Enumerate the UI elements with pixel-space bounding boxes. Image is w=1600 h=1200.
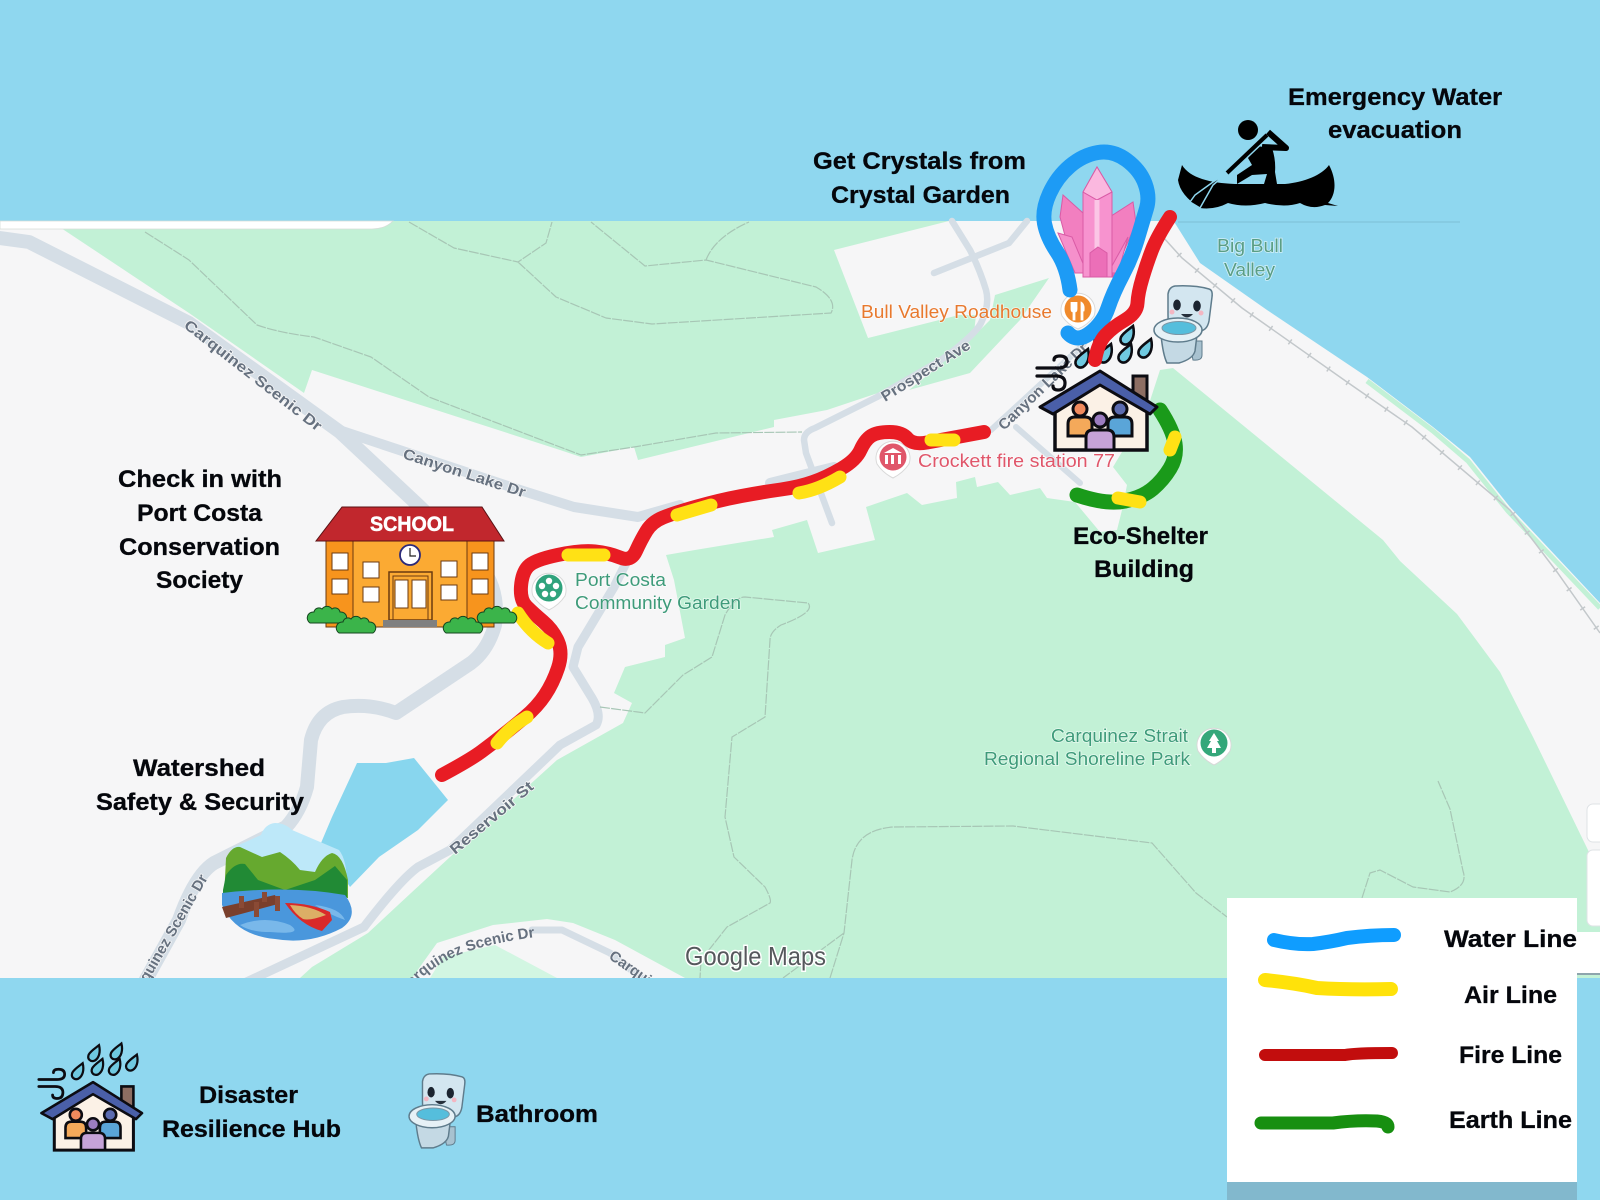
label: Big Bull Valley: Big Bull xyxy=(1217,236,1283,256)
pin: restaurant xyxy=(1061,293,1095,329)
water: Carquinez Strait xyxy=(1173,220,1600,603)
label: Carquinez Strait Regional Shoreline Park xyxy=(984,726,1191,769)
road: lower Scenic Dr xyxy=(532,930,650,985)
park: lower green area xyxy=(300,368,1600,978)
map strip right of legend xyxy=(1577,932,1600,975)
trails xyxy=(145,222,1464,978)
lake xyxy=(321,758,448,887)
map panel xyxy=(0,218,1600,1006)
pin: community garden xyxy=(532,573,566,610)
heading: Emergency Water evacuation xyxy=(1288,84,1502,144)
route: water line xyxy=(1044,152,1148,338)
legend: air line: Air Line xyxy=(1464,982,1557,1009)
label: Canyon Lake Dr: Canyon Lake Dr xyxy=(401,446,528,501)
label: Port Costa Community Garden: Community Garden xyxy=(575,593,741,613)
icon: hub key xyxy=(39,1043,142,1150)
heading: Watershed Safety and Security: Safety & Security xyxy=(96,789,305,816)
label: Carquinez Scenic Dr south: Carquinez Scenic Dr xyxy=(124,871,212,1006)
search bar remnant xyxy=(0,221,393,229)
heading: Check in with Port Costa Conservation Society xyxy=(118,466,282,594)
heading: Get Crystals from Crystal Garden: Get Crystals from xyxy=(813,148,1026,175)
icon: canoe xyxy=(1178,120,1338,208)
road: Canyon Lake Dr xyxy=(339,430,834,517)
label: Carquinez Strait Regional Shoreline Park: Regional Shoreline Park xyxy=(984,749,1191,769)
label: Canyon Lake Dr east: Canyon Lake Dr xyxy=(995,340,1092,434)
land patch: lower scenic drive xyxy=(412,919,685,978)
horizon line xyxy=(1178,221,1460,223)
road: Canyon Lake Dr east xyxy=(991,325,1095,483)
road: Reservoir St and garden road xyxy=(240,555,630,985)
park: upper green area xyxy=(50,221,976,460)
footer band xyxy=(0,978,1600,1200)
label: Google Maps: Google Maps xyxy=(685,941,826,971)
icon: bathroom on map xyxy=(1154,286,1212,363)
heading: Watershed Safety and Security xyxy=(96,755,305,816)
icon: watershed lake and boat xyxy=(222,823,352,941)
legend: earth line xyxy=(1261,1107,1572,1134)
park: small light green area xyxy=(430,945,557,978)
heading: Get Crystals from Crystal Garden xyxy=(813,148,1026,209)
heading: Eco-Shelter Building: Eco-Shelter xyxy=(1073,523,1208,550)
heading: Get Crystals from Crystal Garden: Crystal Garden xyxy=(831,182,1010,209)
road: Carquinez Scenic Dr xyxy=(0,238,496,985)
legend shadow xyxy=(1227,1182,1577,1200)
label: Big Bull Valley: Valley xyxy=(1224,260,1275,280)
heading: Emergency Water evacuation: evacuation xyxy=(1328,117,1462,144)
icon: bathroom key xyxy=(409,1074,465,1148)
icon: disaster resilience hub on map xyxy=(1037,326,1157,450)
heading: Emergency Water evacuation: Emergency Water xyxy=(1288,84,1502,111)
label: Carquinez Strait Regional Shoreline Park: Carquinez Strait xyxy=(1051,726,1188,746)
heading: Check in with Port Costa Conservation Society: Society xyxy=(156,567,244,594)
pin: shoreline park xyxy=(1197,728,1231,765)
legend: air line xyxy=(1265,980,1557,1009)
legend: fire line: Fire Line xyxy=(1459,1042,1562,1069)
icon: crystals xyxy=(1058,167,1136,277)
heading: Check in with Port Costa Conservation Society: Check in with xyxy=(118,466,282,493)
icon: school xyxy=(307,507,517,633)
legend panel xyxy=(1227,898,1577,1182)
shoreline strip xyxy=(1367,381,1600,608)
heading: Check in with Port Costa Conservation Society: Port Costa xyxy=(137,500,263,527)
park: strip under Prospect Ave xyxy=(909,278,1049,390)
label: Carquinez Scenic Dr lower: Carquinez Scenic Dr xyxy=(410,928,534,978)
label: Port Costa Community Garden xyxy=(575,570,741,613)
route: earth line xyxy=(1077,410,1175,502)
label: Prospect Ave: Prospect Ave xyxy=(878,337,974,405)
legend: water line xyxy=(1274,926,1577,953)
heading: Eco-Shelter Building xyxy=(1073,523,1208,583)
label: Big Bull Valley xyxy=(1217,236,1283,280)
label: Bull Valley Roadhouse: Bull Valley Roadhouse xyxy=(861,302,1052,322)
railway along the shore xyxy=(1163,237,1600,633)
label: Carquinez Scenic Dr: Carquinez Scenic Dr xyxy=(181,317,325,435)
text: Disaster Resilience Hub: Disaster xyxy=(199,1082,298,1109)
text: Bathroom: Bathroom xyxy=(476,1101,598,1128)
route: earth line air marks xyxy=(1118,437,1175,502)
legend: earth line: Earth Line xyxy=(1449,1107,1572,1134)
heading: Eco-Shelter Building: Building xyxy=(1094,556,1194,583)
label: Crockett fire station 77: Crockett fire station 77 xyxy=(918,451,1115,471)
label: Reservoir St: Reservoir St xyxy=(447,778,537,858)
label: Carquinez east stub: Carquinez xyxy=(606,947,675,1003)
icon: school: SCHOOL xyxy=(370,513,454,536)
legend: water line: Water Line xyxy=(1444,926,1577,953)
route: fire line xyxy=(442,432,984,775)
heading: Watershed Safety and Security: Watershed xyxy=(133,755,265,782)
text: Disaster Resilience Hub: Resilience Hub xyxy=(162,1116,341,1143)
map control buttons xyxy=(1587,804,1600,926)
road: Prospect Ave xyxy=(804,221,1027,523)
heading: Check in with Port Costa Conservation Society: Conservation xyxy=(119,534,280,561)
route: air line segments xyxy=(497,440,954,743)
text: Disaster Resilience Hub xyxy=(162,1082,341,1143)
pin: fire station xyxy=(876,441,910,478)
label: Port Costa Community Garden: Port Costa xyxy=(575,570,667,590)
route: fire line north xyxy=(1095,217,1170,360)
